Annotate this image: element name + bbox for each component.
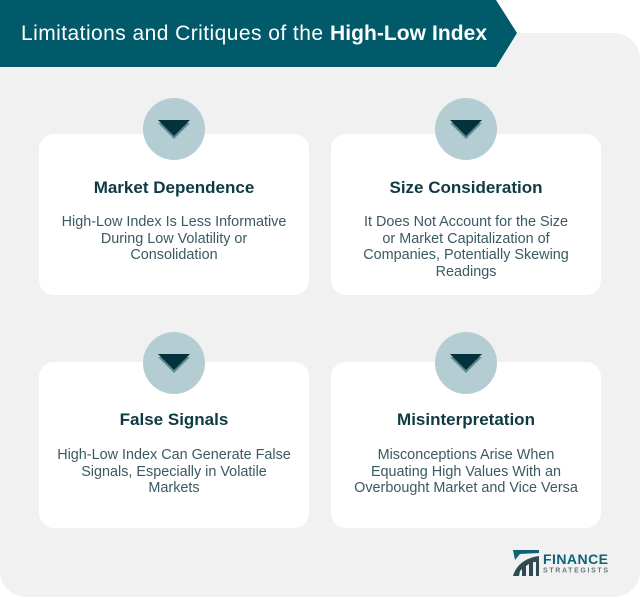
- text: market dependence: Consolidation: [130, 247, 218, 263]
- title banner: High-Low Index: [330, 22, 487, 45]
- heading: misinterpretation: Misinterpretation: [397, 410, 535, 429]
- text: false signals: Markets: [148, 480, 200, 496]
- text: misinterpretation: Overbought Market and Vice Versa: [354, 480, 578, 496]
- heading: size consideration: Size Consideration: [389, 178, 543, 197]
- text: misinterpretation: Equating High Values With an: [371, 464, 561, 480]
- heading: false signals: False Signals: [120, 410, 228, 429]
- text: size consideration: Companies, Potentially Skewing: [363, 247, 569, 263]
- text: misinterpretation: [354, 447, 578, 496]
- icon: arrow badge 1: [143, 98, 205, 160]
- text: false signals: [57, 447, 291, 496]
- text: market dependence: High-Low Index Is Less Informative: [62, 214, 286, 230]
- logo: finance strategists: FINANCE: [543, 551, 608, 567]
- text: false signals: High-Low Index Can Generate False: [57, 447, 291, 463]
- text: market dependence: [62, 214, 286, 263]
- title banner: Limitations and Critiques of the: [21, 22, 323, 45]
- text: size consideration: [363, 214, 569, 280]
- panel: market dependence: [39, 134, 309, 295]
- text: market dependence: During Low Volatility or: [101, 230, 247, 246]
- icon: arrow badge 4: [435, 332, 497, 394]
- text: size consideration: It Does Not Account for the Size: [364, 214, 568, 230]
- panel: size consideration: [331, 134, 601, 295]
- text: misinterpretation: Misconceptions Arise When: [378, 447, 554, 463]
- text: false signals: Signals, Especially in Volatile: [81, 464, 267, 480]
- heading: market dependence: Market Dependence: [94, 178, 254, 197]
- panel: misinterpretation: [331, 362, 601, 528]
- text: size consideration: or Market Capitalization of: [382, 230, 550, 246]
- panel: false signals: [39, 362, 309, 528]
- icon: arrow badge 2: [435, 98, 497, 160]
- text: size consideration: Readings: [436, 264, 496, 280]
- icon: arrow badge 3: [143, 332, 205, 394]
- title banner: [0, 0, 517, 67]
- logo: finance strategists: [513, 550, 608, 576]
- logo: finance strategists: STRATEGISTS: [543, 568, 608, 574]
